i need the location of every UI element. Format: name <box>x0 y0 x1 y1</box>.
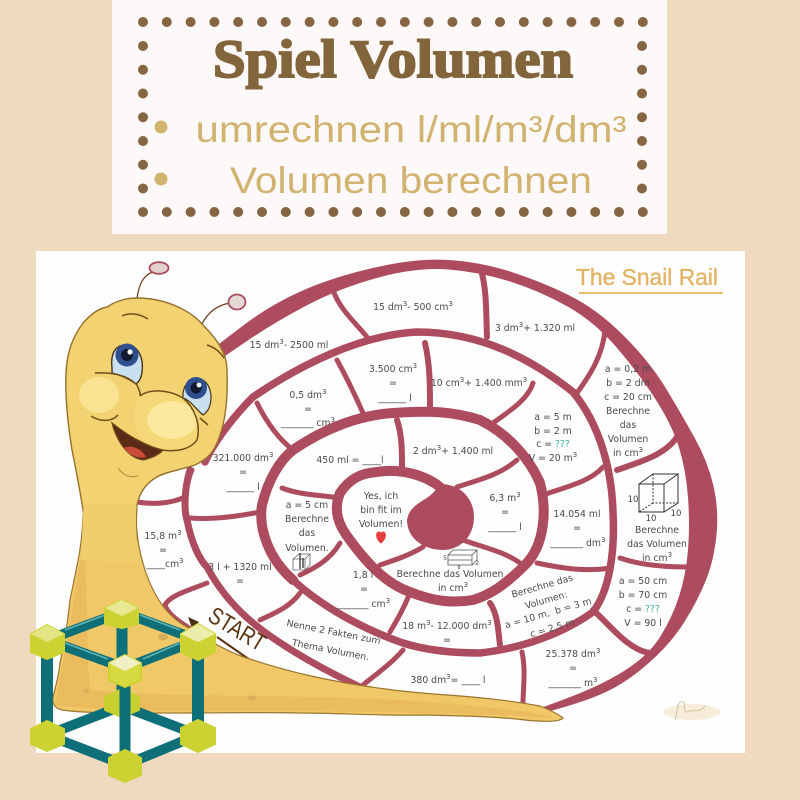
board cell texts: 6,3 m <box>489 493 516 504</box>
board cell texts: c = 2,5 m <box>529 617 576 640</box>
foot shading <box>55 540 556 718</box>
board cell texts: 3 <box>386 597 390 605</box>
back vertical bar <box>116 612 128 700</box>
board cell texts: = <box>389 378 397 389</box>
board cell texts: = <box>159 545 167 556</box>
board cell texts: 10 cm <box>431 378 460 389</box>
heading: The Snail Rail: The Snail Rail <box>576 264 718 290</box>
bar highlights <box>65 615 180 659</box>
board cell texts: Thema Volumen. <box>290 637 370 663</box>
board cell texts: a = 10 m, b = 3 m <box>504 596 593 631</box>
board cell texts: 3 <box>403 300 407 308</box>
title: Spiel Volumen <box>213 29 573 89</box>
board cell texts: 3 <box>464 581 468 589</box>
board cell texts: _______ dm <box>551 538 601 549</box>
nose outline and brows <box>91 314 224 451</box>
board cell texts: in cm <box>642 553 668 564</box>
third ring <box>261 412 544 602</box>
board cell texts: Nenne 2 Fakten zum <box>285 618 381 647</box>
snail shell spiral <box>137 260 717 718</box>
icon: heart <box>377 532 385 543</box>
board cell texts: das Volumen <box>627 539 687 550</box>
board cell texts: 25.378 dm <box>546 649 596 660</box>
bullet: calculate: Volumen berechnen <box>230 160 592 201</box>
board cell texts: = <box>304 404 312 415</box>
board cell texts: _______ cm <box>336 599 386 610</box>
board cell texts: 380 dm <box>410 675 446 686</box>
board cell texts: V = 90 l <box>624 618 662 629</box>
board cell texts: Berechne das <box>510 573 574 601</box>
icon: 10 cube: 10 <box>628 495 638 505</box>
icon: small box: 2 <box>475 560 479 567</box>
head and neck <box>66 298 227 540</box>
board cell texts: 3 <box>523 376 527 384</box>
board cell texts: Berechne <box>285 514 329 525</box>
board cell texts: in cm <box>438 583 464 594</box>
board cell texts: = <box>573 523 581 534</box>
board cell texts: a = 5 m <box>534 412 572 423</box>
board cell texts: - 12.000 dm <box>431 621 487 632</box>
board cell texts: c = ??? <box>536 439 570 450</box>
board cell texts: das <box>299 528 315 539</box>
board cell texts: 14.054 ml <box>553 509 601 520</box>
board cell texts: = <box>360 584 368 595</box>
board cell texts: 3 <box>519 321 523 329</box>
board cell texts: Volumen! <box>359 519 403 530</box>
board cell texts: 3 <box>279 338 284 346</box>
body and foot <box>53 505 563 721</box>
nose <box>134 391 198 451</box>
board cell texts: b = 2 m <box>534 426 572 437</box>
board cell texts: 3 <box>179 557 184 565</box>
board cell texts: 3 <box>516 491 521 499</box>
back bottom node <box>105 689 139 717</box>
board cell texts: 321.000 dm <box>213 453 269 464</box>
board cell texts: 1,8 l <box>353 570 373 581</box>
board cell texts: c = 20 cm <box>604 392 652 403</box>
cheek highlight <box>79 377 119 413</box>
board cell texts: 15 dm <box>373 302 403 313</box>
board cell texts: 3 <box>448 300 453 308</box>
board cell texts: 3 <box>269 451 273 459</box>
board cell texts: 450 ml = ____l <box>316 455 384 466</box>
icon: tiny cube <box>293 553 310 570</box>
icon: small box: 5 <box>443 555 447 562</box>
board cell texts: a = 5 cm <box>286 500 328 511</box>
board cell texts: 3 dm <box>495 323 519 334</box>
board cell texts: ______ l <box>377 393 412 404</box>
board cell texts: 3 <box>487 619 492 627</box>
board cell texts: 3 <box>413 362 417 370</box>
board cell texts: 3 <box>437 444 441 452</box>
board cell texts: = <box>569 663 577 674</box>
board cell texts: = <box>236 576 244 587</box>
board cell texts: 3 <box>331 416 335 424</box>
board cell texts: in cm <box>613 448 639 459</box>
board cell texts: _______ cm <box>281 418 331 429</box>
board cell texts: b = 2 dm <box>606 378 650 389</box>
board cell texts: c = ??? <box>626 604 660 615</box>
icon: 10 cube: 10 <box>671 509 681 519</box>
icon: 10 cube: 10 <box>646 514 656 524</box>
board cell texts: Volumen. <box>285 543 329 554</box>
board cell texts: 3 l + 1320 ml <box>208 562 272 573</box>
cube nodes <box>31 600 215 782</box>
board cell texts: + 1.400 mm <box>464 378 523 389</box>
board cell texts: 15 dm <box>250 340 279 351</box>
cube frame model <box>31 600 215 782</box>
board cell texts: bin fit im <box>360 505 402 516</box>
board cell texts: 3 <box>460 376 464 384</box>
front vertical bar <box>120 668 130 765</box>
board cell texts: Berechne das Volumen <box>397 569 504 580</box>
radial dividers <box>137 270 687 703</box>
lower bars <box>47 706 198 765</box>
bullet: convert: umrechnen l/ml/m³/dm³ <box>196 109 626 150</box>
board cell texts: = <box>501 507 509 518</box>
upper bars <box>47 612 198 668</box>
board cell texts: 2 dm <box>413 446 437 457</box>
board cell texts: Volumen: <box>524 589 569 612</box>
board cell texts: = ____ l <box>451 675 486 686</box>
board cell texts: 0,5 dm <box>289 390 322 401</box>
second ring continued <box>185 470 362 688</box>
board cell texts <box>144 300 687 689</box>
board cell texts: + 1.320 ml <box>523 323 575 334</box>
board cell texts: - 500 cm <box>407 302 448 313</box>
left eye <box>112 344 142 384</box>
side verticals <box>47 640 198 735</box>
board cell texts: 15,8 m <box>144 531 177 542</box>
START label: START <box>203 602 271 657</box>
snail character <box>53 262 563 721</box>
icon: small box <box>443 550 479 571</box>
board cell texts: das <box>620 420 636 431</box>
board cell texts: ______ l <box>225 482 260 493</box>
board cell texts: 18 m <box>402 621 426 632</box>
board cell texts: a = 0,2 m <box>605 364 651 375</box>
board cell texts: + 1.400 ml <box>441 446 493 457</box>
board cell texts: 3 <box>573 451 577 459</box>
board cell texts: 3 <box>426 619 431 627</box>
board cell texts: = <box>239 467 247 478</box>
tongue <box>124 447 146 458</box>
second ring <box>205 332 613 653</box>
board cell texts: _______ m <box>548 678 593 689</box>
board cell texts: = <box>443 635 451 646</box>
board cell texts: Volumen <box>608 434 648 445</box>
board cell texts: Yes, ich <box>363 491 398 502</box>
panel: game board <box>36 251 745 753</box>
board cell texts: a = 50 cm <box>619 576 667 587</box>
board cell texts: ____cm <box>146 559 179 570</box>
nose highlight <box>147 401 197 439</box>
board cell texts: Berechne <box>635 525 679 536</box>
board cell texts: 3 <box>668 551 672 559</box>
board cell texts: ______ l <box>487 522 522 533</box>
mouth <box>112 423 163 460</box>
START label <box>188 602 271 660</box>
signature stamp <box>664 702 720 720</box>
board cell texts: 3 <box>639 446 643 454</box>
centre blob <box>407 484 474 550</box>
board cell texts: 3 <box>601 536 605 544</box>
right eye <box>183 377 211 415</box>
icon: 10 cube <box>628 474 681 524</box>
board cell texts: 3 <box>593 676 598 684</box>
outer shell band <box>215 260 717 718</box>
board cell texts: 3 <box>596 647 600 655</box>
board cell texts: Berechne <box>606 406 650 417</box>
panel: title card <box>112 0 667 234</box>
board cell texts: b = 70 cm <box>619 590 667 601</box>
board cell texts: 3 <box>446 673 451 681</box>
board cell texts: 3.500 cm <box>369 364 413 375</box>
foot spots <box>83 634 256 700</box>
board cell texts: V = 20 m <box>529 453 573 464</box>
board cell texts: 3 <box>322 388 327 396</box>
antennae <box>137 262 246 324</box>
board cell texts: - 2500 ml <box>284 340 328 351</box>
icon: small box: 8 <box>457 565 461 571</box>
board cell texts: 3 <box>177 529 182 537</box>
